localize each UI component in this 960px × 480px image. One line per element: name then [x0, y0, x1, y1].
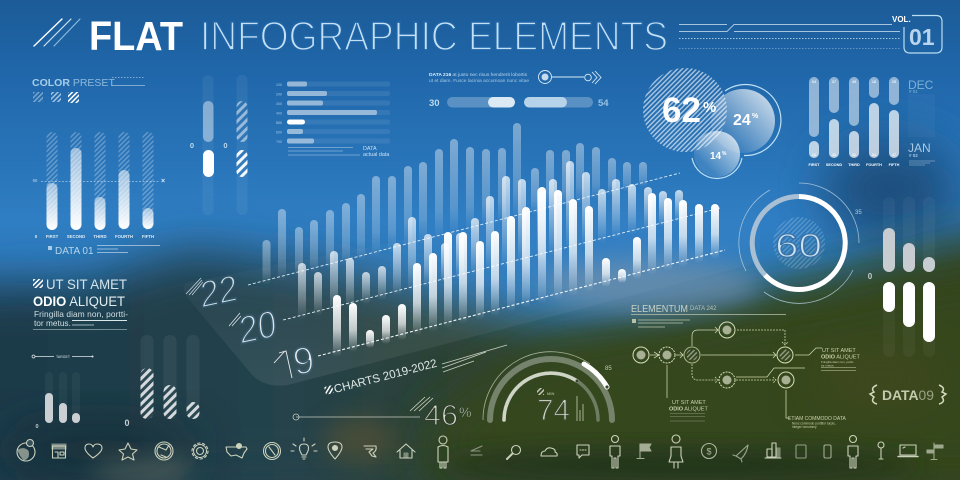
flow connectors: [650, 327, 822, 418]
values: [662, 91, 759, 162]
icon: flag: [637, 444, 651, 458]
icon: shop: [52, 444, 66, 458]
bar labels: 16: [812, 153, 816, 157]
icon: speech bubble: [577, 445, 589, 458]
flow note bottom: ETIAM COMMODO DATA: [788, 416, 847, 422]
icon: city buildings: [765, 443, 781, 458]
row labels: [276, 83, 282, 144]
inner hatch: [773, 217, 825, 269]
icon: pointing hand: [364, 446, 376, 457]
flow note right: [821, 348, 860, 370]
lower bars: [883, 282, 935, 342]
bar labels: THIRD: [848, 163, 860, 167]
small bar chart: target: [32, 355, 94, 430]
axis labels: 50: [33, 178, 38, 183]
icon: house: [397, 444, 415, 458]
label: data 01: DATA 01: [55, 246, 94, 257]
icon: gear: [192, 443, 208, 459]
range bar 1: [447, 97, 515, 108]
calendar labels: dec and jan: # 01: [909, 89, 918, 94]
bar labels: 37: [832, 80, 836, 84]
inner band: [504, 373, 598, 420]
outer thin arc: [483, 352, 590, 420]
title: [34, 13, 668, 59]
progress ring base: [752, 196, 799, 275]
icon: man standing: [848, 436, 858, 468]
bar labels: FOURTH: [866, 163, 882, 167]
bar labels: 54: [872, 153, 877, 157]
calendar labels: dec and jan: DEC: [908, 78, 934, 92]
bar labels: 49: [852, 80, 856, 84]
outer thin ring: [739, 183, 859, 303]
badge frame: [904, 16, 942, 53]
icon: globe: [155, 442, 173, 460]
calendar labels: dec and jan: [908, 78, 935, 165]
badge label: VOL.: [892, 15, 911, 24]
icon: title slashes: [34, 19, 80, 46]
label: data09: [870, 385, 946, 404]
chart: perspective bars: [248, 123, 725, 357]
flow note bottom: integer nonummy: [792, 425, 817, 429]
icon: woman: [438, 436, 448, 468]
dashed line 2020: [283, 208, 720, 320]
axis labels: 0: [35, 234, 38, 239]
ring gauge: 60: [739, 183, 862, 303]
bars: [45, 393, 80, 423]
icon row: [17, 435, 943, 468]
bar labels: 18: [872, 80, 876, 84]
heading: infographic elements: INFOGRAPHIC ELEMENTS: [200, 13, 668, 59]
footer text: actual data: [363, 152, 389, 158]
axis labels: SECOND: [67, 234, 85, 239]
upper bars: [883, 228, 935, 272]
row labels: 100: [276, 83, 282, 87]
icon: map pin: [328, 442, 342, 459]
flow note left: [669, 400, 708, 421]
tracks: [287, 82, 390, 144]
outer band: [490, 359, 612, 420]
icon: woman in dress: [669, 435, 683, 468]
ring value: 60: [775, 227, 822, 264]
lower solid bars: [809, 103, 899, 158]
stat: 46 percent: %: [459, 404, 471, 420]
values: 24: [733, 112, 751, 129]
bar row 2022: [262, 123, 647, 285]
icon: star: [119, 443, 137, 460]
icon: tablet: [796, 445, 806, 458]
stat: 46 percent: [293, 397, 471, 432]
calendar labels: dec and jan: JAN: [908, 141, 931, 155]
bar labels: 64: [812, 80, 817, 84]
bars: [46, 148, 154, 230]
row labels: 200: [276, 92, 282, 96]
paired pill bars: 0: [223, 141, 228, 150]
label: data 01: [48, 246, 160, 257]
circle: 62 percent: [643, 68, 727, 152]
values: [287, 82, 377, 144]
text block: ut sit amet: [33, 277, 128, 330]
flow note right: ODIO ALIQUET: [821, 354, 860, 360]
panel: perspective platform: [184, 170, 760, 386]
flow heading: [631, 303, 786, 327]
icon: compass: [264, 442, 280, 460]
icon: rocket: [733, 445, 748, 462]
gauge: [483, 352, 612, 427]
axis labels: ×: [161, 178, 165, 185]
bar labels: FIFTH: [889, 163, 900, 167]
text block: ut sit amet: tor metus.: [34, 318, 71, 328]
slider caption: ut et diam. Fusce lacinia accumsan nunc vitae: [429, 78, 529, 84]
dashed line 2019: [318, 250, 725, 356]
small bar chart: target: 0: [35, 424, 39, 430]
year label: 19: 9: [290, 339, 317, 384]
dashed line 2022: [248, 173, 680, 285]
bar labels: [809, 80, 900, 167]
icon: globe pin: [17, 440, 35, 461]
panel: color preset: [32, 77, 145, 103]
row labels: 400: [276, 112, 282, 116]
text block: ut sit amet: UT SIT AMET: [46, 277, 127, 292]
bar row 2020: [298, 161, 683, 320]
circle: 24 percent: [711, 85, 781, 156]
icon: signpost: [927, 443, 943, 460]
bar labels: 47: [892, 153, 896, 157]
ring gauge: 60: 35: [855, 210, 862, 216]
bars: [140, 368, 200, 419]
icon: pin marker: [878, 442, 884, 459]
text block: ut sit amet: Fringilla diam non, portti-: [34, 309, 128, 319]
flow note right: Fringilla diam non, portti-: [821, 360, 854, 364]
icon: cloud: [541, 448, 557, 456]
bar labels: SECOND: [826, 163, 842, 167]
year label: 20: 20: [238, 302, 278, 353]
stacked bars: first to fifth: [809, 77, 900, 167]
icon: magnifier: [507, 446, 520, 459]
highlighted arc: [584, 364, 607, 387]
bar labels: 32: [852, 153, 856, 157]
values: 62: [662, 91, 701, 130]
bar labels: 25: [892, 80, 896, 84]
axis labels: [33, 178, 165, 239]
icon: phone: [824, 445, 831, 458]
gauge: 85: [605, 366, 612, 372]
flow heading: ELEMENTUM: [631, 303, 688, 315]
volume badge and header lines: [679, 15, 942, 53]
icon: light bulb: [291, 438, 317, 459]
icon: usa map: [226, 444, 247, 458]
bar labels: FIRST: [809, 163, 820, 167]
horizontal bar list: [276, 82, 390, 158]
hatched bar chart: bottom left: [124, 335, 200, 428]
slider widget: 30: [429, 98, 440, 109]
values: 14: [710, 151, 722, 162]
chart title: charts 2019-2022: CHARTS 2019-2022: [333, 358, 438, 396]
target marker: TARGET: [56, 355, 71, 359]
values: %: [722, 151, 727, 157]
badge number: 01: [909, 24, 935, 50]
values: %: [752, 113, 759, 120]
icon: slider knob: [538, 70, 601, 84]
axis labels: FOURTH: [115, 234, 133, 239]
icon: dollar coin: $: [706, 446, 712, 456]
flow nodes: [633, 322, 794, 388]
bars: right pair: [868, 197, 935, 357]
icon: man: [610, 436, 620, 468]
flow note bottom: Nunc commodo porttitor turpis,: [792, 422, 836, 426]
range bar 2: [524, 97, 593, 108]
icon: laptop: [898, 445, 918, 456]
stat: 46 percent: 46: [424, 400, 458, 432]
icon: heart: [85, 444, 102, 458]
row labels: 600: [276, 130, 282, 134]
circle: 14 percent: [692, 131, 742, 178]
slider widget: [429, 70, 609, 109]
donut circles: [643, 68, 781, 178]
paired pill bars: [190, 75, 248, 215]
paired pill bars: 0: [190, 141, 194, 150]
progress ring: [765, 196, 845, 289]
flow note right: tor metus.: [821, 364, 835, 368]
bars: right pair: 0: [868, 272, 873, 281]
flow note bottom: [788, 416, 847, 429]
hatched bar chart: bottom left: 0: [124, 418, 130, 428]
text block: ut sit amet: ODIO ALIQUET: [33, 294, 125, 309]
gauge: MIN: [547, 391, 554, 396]
icon: dollar coin: [702, 444, 716, 458]
flow diagram: elementum: [631, 303, 860, 429]
bar row 2019: [333, 187, 719, 357]
bar chart: left five bars: [33, 132, 165, 239]
label: data09: DATA09: [882, 387, 934, 403]
bar labels: 42: [832, 153, 836, 157]
heading: color preset: COLOR PRESET: [32, 77, 115, 89]
flow note left: UT SIT AMET: [672, 400, 706, 406]
footer text: DATA: [363, 146, 377, 152]
values: %: [703, 99, 716, 116]
chart title: charts 2019-2022: [324, 345, 507, 396]
hatched tracks: [46, 132, 154, 230]
row labels: 700: [276, 140, 282, 144]
axis labels: FIRST: [46, 234, 59, 239]
flow note right: UT SIT AMET: [822, 348, 856, 354]
gauge readout: 74: [537, 394, 570, 427]
axis labels: FIFTH: [142, 234, 154, 239]
color swatches: [33, 92, 79, 103]
footer text: [363, 146, 389, 158]
heading: flat: FLAT: [89, 13, 183, 59]
flow heading: DATA 242: [690, 306, 717, 312]
calendar labels: dec and jan: # 02: [909, 153, 918, 158]
flow note left: ODIO ALIQUET: [669, 406, 708, 412]
slider caption: DATA 216 at justo nec risus hendrerit lobortis: [429, 72, 528, 78]
row labels: 300: [276, 102, 282, 106]
slider widget: 54: [598, 98, 609, 109]
upper hatched bars: [809, 77, 899, 137]
year label: 19: [274, 339, 317, 384]
icon: hand: [471, 446, 482, 455]
icon: hatch square: [33, 279, 43, 288]
row labels: 500: [276, 121, 282, 125]
year label: 22: 22: [199, 266, 239, 316]
slider caption: [429, 72, 529, 84]
axis labels: THIRD: [93, 234, 107, 239]
